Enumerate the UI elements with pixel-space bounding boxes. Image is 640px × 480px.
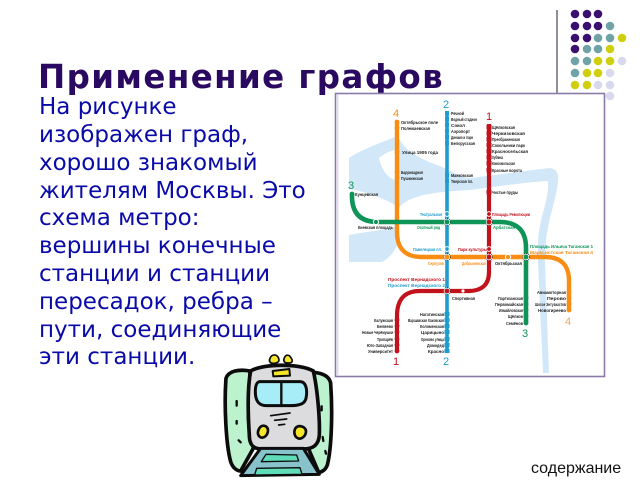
station labels: line 3 and 4 south: Щёлков: [508, 314, 523, 319]
body text: [39, 94, 306, 370]
station labels: centre: Добрынинская: [462, 260, 486, 266]
train body: [248, 365, 319, 449]
station labels: line 1 north: Комсомольская: [492, 161, 515, 166]
station labels: line 3 and 4 south: Партизанская: [498, 296, 523, 301]
station labels: centre: Спортивная: [452, 296, 475, 301]
station labels: line 1 south: Новые Черёмушки: [362, 330, 393, 335]
station labels: centre: Театральная: [420, 212, 442, 217]
station labels: line 1 south: Университет: [368, 349, 394, 354]
station labels: line 1 north: Лубянка: [492, 154, 503, 160]
station labels: line 1 north: Красносельская: [492, 149, 528, 154]
station labels: centre: Серпухов: [428, 261, 444, 266]
line 3 (green): 3: [522, 328, 528, 340]
station labels: line 1 north: Чистые пруды: [492, 190, 518, 195]
interchange stations: [373, 212, 529, 294]
station labels: line 3 and 4 south: Измайловская: [499, 307, 523, 313]
station labels: centre: Проспект Вернадского 2: [388, 283, 445, 288]
decorative dots and rule: [556, 10, 626, 100]
station labels: centre: Павелецкая пл.: [413, 247, 442, 252]
line 2 (blue): 2: [443, 356, 449, 368]
body text: пересадок, ребра –: [39, 289, 273, 315]
station labels: line 2 north: Сокол: [451, 123, 465, 128]
contents link: содержание: [531, 460, 621, 477]
station labels: centre: Киевская площадь: [358, 225, 393, 230]
station labels: centre: Площадь Ильича Таганская 1: [530, 244, 593, 249]
station labels: line 1 south: [362, 318, 394, 354]
line 3 (green): 3: [348, 180, 354, 192]
station labels: line 3 and 4 south: Шоссе Энтузиастов: [535, 302, 566, 307]
station labels: line 1 south: Юго-Западная: [367, 343, 393, 348]
line 1 (red): [393, 111, 492, 368]
line 4 (orange): [393, 108, 571, 328]
station labels: line 1 north: Преображенская: [492, 136, 520, 142]
station labels: centre: Кунцевская: [355, 192, 378, 197]
station labels: line 2 north: Тверская пл.: [451, 179, 473, 184]
station labels: line 2 north: Маяковская: [451, 173, 473, 178]
line 4 (orange): 4: [565, 316, 571, 328]
station labels: line 1 north: Красные ворота: [492, 168, 522, 173]
station labels: centre: [355, 192, 593, 301]
station labels: line 1 south: Тропарёв: [377, 337, 393, 342]
panel marks: [237, 401, 326, 454]
line 2 (blue): [443, 99, 450, 368]
station labels: line 3 and 4 south: Семёнов: [506, 321, 523, 326]
station labels: line 1 north: Сокольники парк: [492, 143, 526, 148]
station labels: line 2 south: Красно: [428, 349, 444, 354]
body text: На рисунке: [39, 94, 177, 120]
station labels: centre: Октябрьская: [495, 260, 522, 266]
station labels: line 2 south: Орехово улица: [421, 337, 444, 342]
headlights: [258, 426, 268, 438]
windscreen: [255, 382, 307, 406]
station labels: line 3 and 4 south: Перово: [547, 296, 566, 301]
left green side panel: [225, 370, 253, 471]
station labels: line 2 south: [408, 312, 444, 354]
line 2 (blue): 2: [443, 99, 449, 111]
line 3 (green): [348, 180, 528, 340]
body text: жителям Москвы. Это: [39, 178, 306, 204]
station labels: centre: Проспект Вернадского 1: [388, 277, 445, 282]
station labels: line 2 north: [451, 110, 477, 184]
line 4 (orange): 4: [393, 108, 399, 120]
station labels: line 4 north: Улица 1905 года: [402, 150, 438, 155]
station labels: line 2 south: Коломенская: [420, 324, 444, 329]
station labels: line 4 north: Пушкинская: [401, 176, 423, 181]
station labels: line 3 and 4 south: Первомайская: [495, 301, 523, 307]
station labels: line 2 south: Варшавская Каховская: [408, 318, 444, 323]
station labels: line 3 and 4 south: Новогиреево: [538, 308, 566, 313]
river: [349, 137, 558, 373]
body text: пути, соединяющие: [39, 317, 281, 343]
station labels: line 1 south: Калужская: [374, 318, 393, 323]
body text: схема метро:: [39, 205, 199, 231]
station labels: line 4 north: Октябрьское поле: [401, 119, 438, 125]
body text: изображен граф,: [39, 122, 248, 148]
body text: вершины конечные: [39, 233, 276, 259]
station labels: line 1 north: Щёлковская: [492, 125, 515, 130]
roof lamps: [269, 355, 279, 363]
body text: хорошо знакомый: [39, 150, 258, 176]
station labels: centre: Парк культуры: [458, 247, 487, 252]
station labels: line 3 and 4 south: [495, 290, 566, 326]
body text: станции и станции: [39, 261, 270, 287]
station labels: line 2 south: Нагатинская: [420, 312, 444, 317]
station labels: centre: Марксистская Таганская 4: [530, 250, 593, 255]
station labels: centre: Площадь Революции: [492, 212, 530, 217]
station labels: line 2 north: Водный стадион: [451, 116, 477, 122]
station labels: line 4 north: Полежаевская: [401, 126, 430, 131]
station labels: line 2 south: Царицыно: [421, 330, 444, 335]
line 1 (red): 1: [393, 356, 399, 368]
station labels: line 2 south: Домодед: [427, 343, 444, 348]
station labels: line 3 and 4 south: Авиамоторная: [537, 290, 566, 295]
track: [241, 448, 319, 476]
front grille marks: [271, 413, 290, 425]
station labels: line 1 north: Черкизовская: [492, 131, 525, 136]
body text: эти станции.: [39, 344, 195, 370]
station labels: centre: Охотный ряд: [417, 224, 440, 230]
station labels: centre: Арбатская: [493, 224, 515, 230]
station labels: line 1 north: [492, 125, 528, 195]
station labels: line 1 south: Беляево: [377, 324, 393, 329]
right green side panel: [308, 372, 332, 472]
station labels: line 4 north: [401, 119, 438, 181]
station labels: line 2 north: Динамо и парк: [451, 135, 473, 140]
line 1 (red): 1: [486, 111, 492, 123]
station labels: line 4 north: Баррикадная: [401, 170, 423, 175]
top lamp: [273, 369, 290, 376]
title: Применение графов: [38, 58, 444, 96]
station labels: line 2 north: Речной: [451, 110, 464, 116]
station labels: line 2 north: Аэропорт: [451, 129, 471, 134]
station labels: line 2 north: Белорусская: [451, 141, 475, 146]
